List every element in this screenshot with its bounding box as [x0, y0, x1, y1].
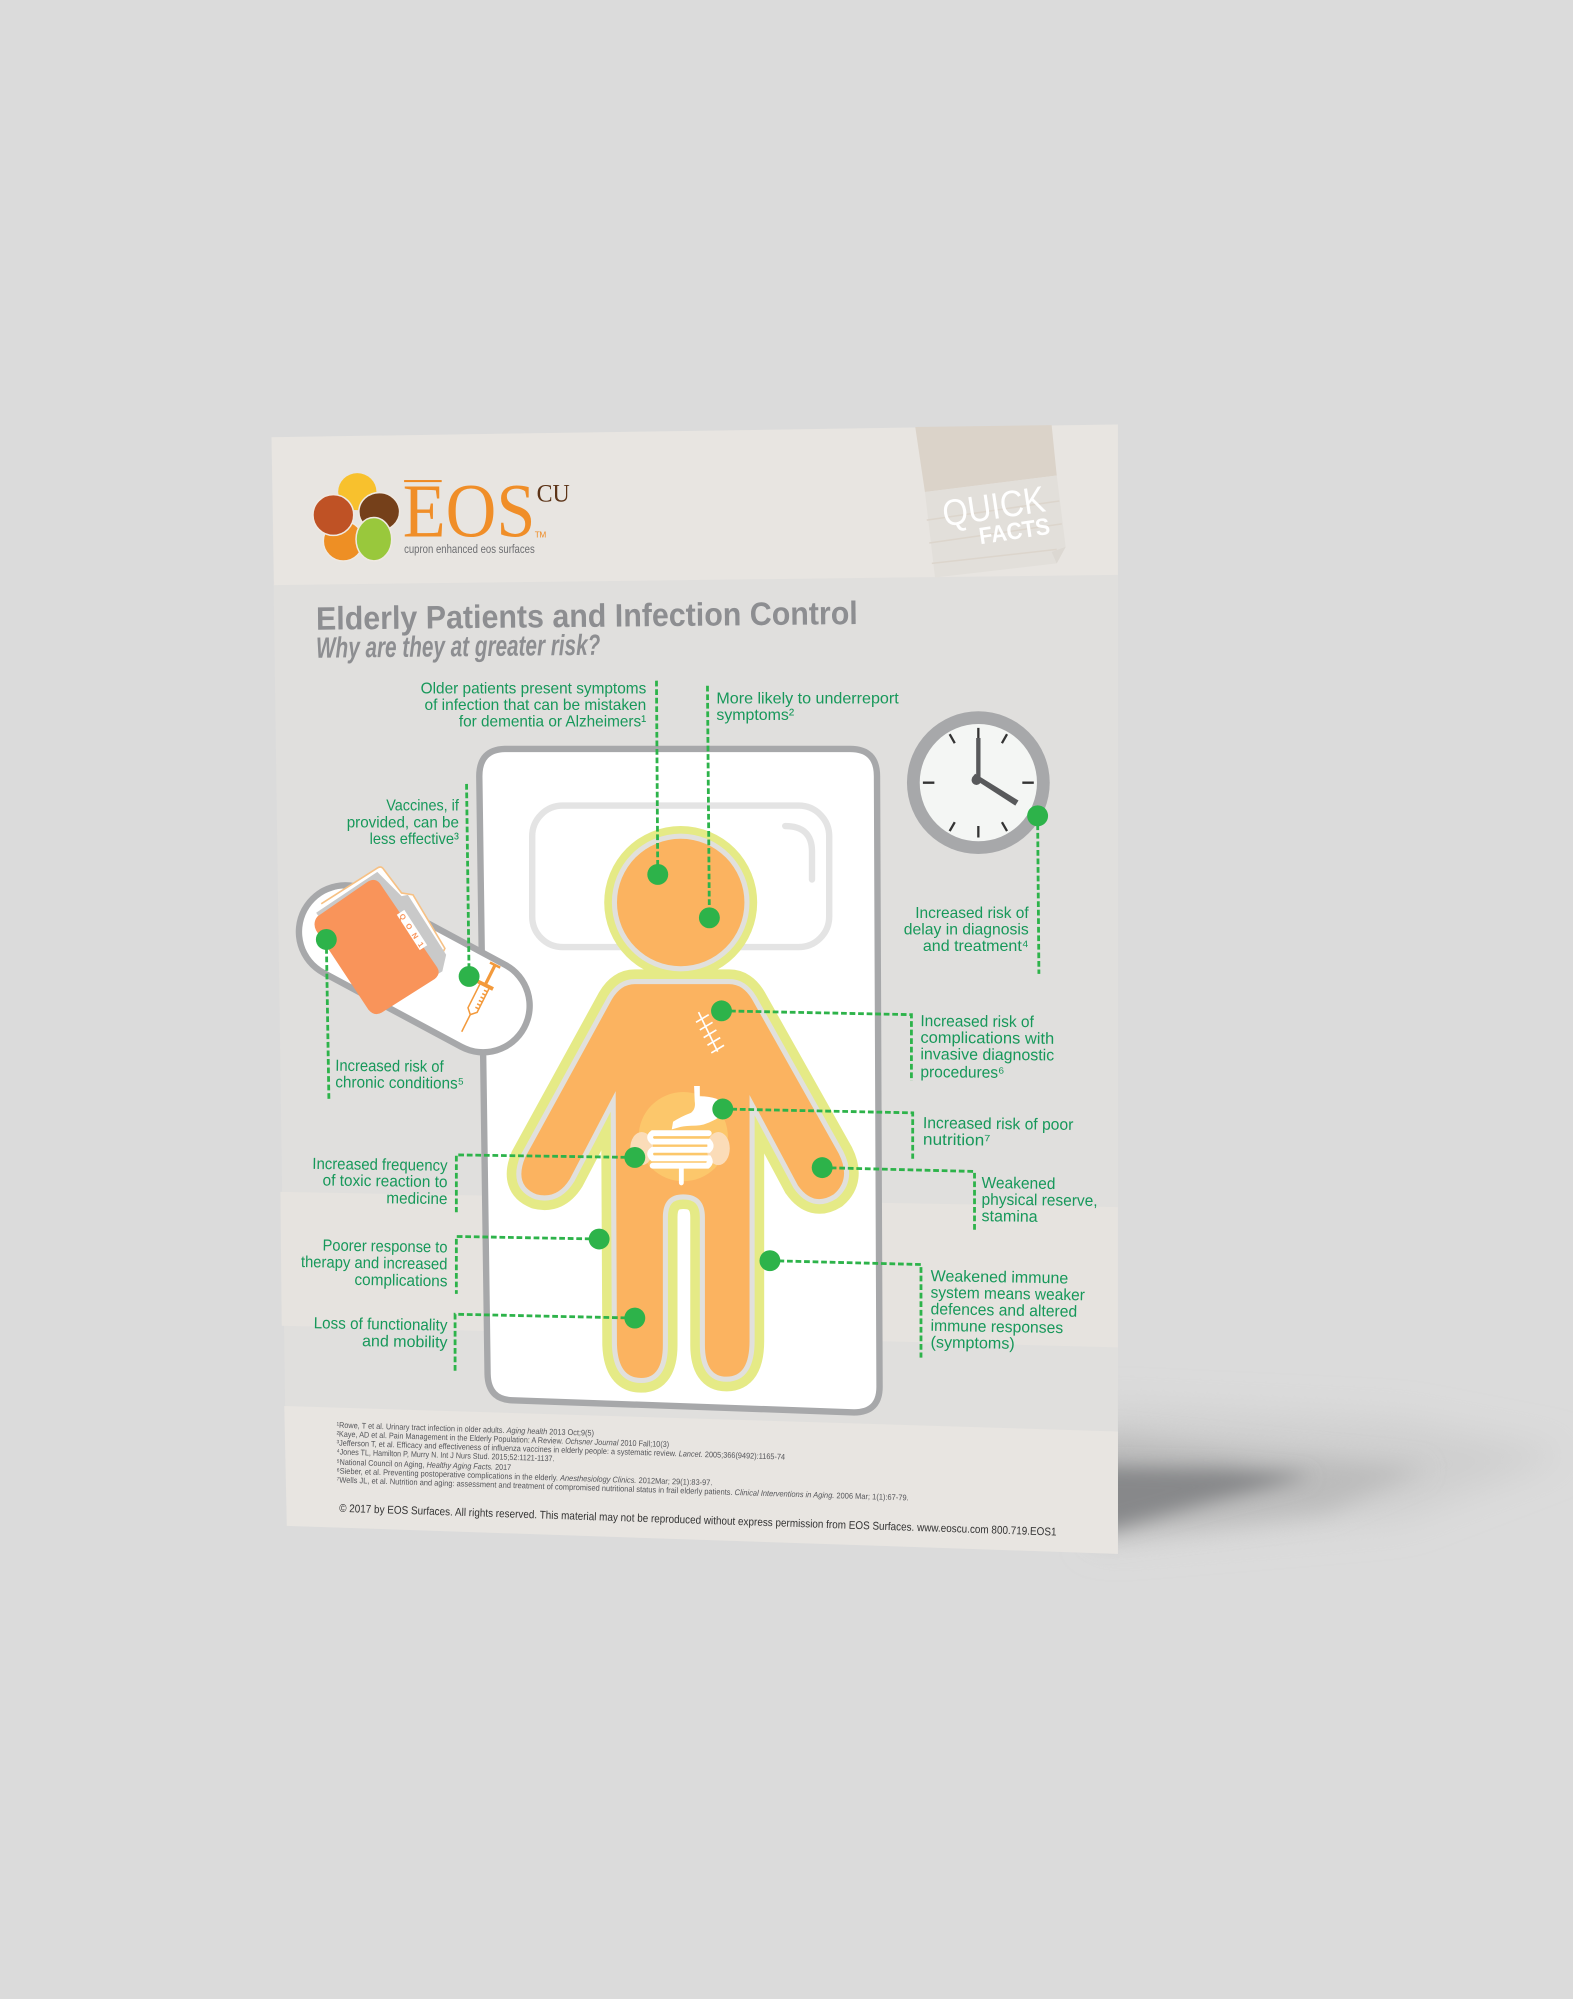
pillow [532, 806, 829, 947]
callout: underreport: symptoms² [716, 706, 795, 724]
callout: invasive procedures: complications with [920, 1029, 1054, 1048]
references: ¹Rowe, T et al. Urinary tract infection in older adults. Aging health 2013 Oct;9(5) [336, 1421, 594, 1438]
callout: delay [904, 904, 1029, 955]
callout: nutrition [923, 1114, 1074, 1150]
callout: older patients: Older patients present symptoms [421, 679, 646, 697]
callout: physical reserve: Weakened [981, 1174, 1056, 1193]
callout: underreport [716, 690, 899, 724]
callout: older patients: of infection that can be mistaken [424, 696, 646, 714]
callout: immune system: immune responses [930, 1317, 1063, 1337]
callout: vaccines: Vaccines, if [386, 797, 459, 815]
icon: quick facts tag [915, 425, 1066, 577]
references [336, 1421, 909, 1502]
callout: immune system: (symptoms) [930, 1333, 1015, 1353]
references: ²Kaye, AD et al. Pain Management in the Elderly Population: A Review. Ochsner Journal 2010 Fall;10(3) [336, 1430, 670, 1449]
callout: poorer response [301, 1236, 448, 1290]
icon: digestive organs [630, 1086, 730, 1183]
subtitle: Why are they at greater risk? [316, 629, 601, 665]
callout: delay: delay in diagnosis [904, 920, 1029, 938]
callout: nutrition: nutrition⁷ [923, 1131, 991, 1150]
callout: physical reserve [981, 1174, 1098, 1226]
callout: underreport: More likely to underreport [716, 690, 899, 708]
icon: folder [314, 867, 446, 1014]
logo: TM [535, 530, 546, 539]
callout: immune system [930, 1267, 1086, 1353]
logo: EOS [403, 469, 535, 554]
callout: nutrition: Increased risk of poor [923, 1114, 1074, 1134]
references: ⁷Wells JL, et al. Nutrition and aging: assessment and treatment of compromised nutritional status in frail elderly patients. Clinical Interventions in Aging. 2006 Mar; 1(1):67-79. [336, 1475, 909, 1502]
callout: poorer response: Poorer response to [322, 1236, 448, 1256]
callout: toxic reaction [312, 1155, 448, 1208]
copyright line: © 2017 by EOS Surfaces. All rights reserved. This material may not be reproduced without express permission from EOS Surfaces. www.eoscu.com 800.719.EOS1 [339, 1503, 1057, 1539]
callout: functionality: and mobility [362, 1332, 448, 1352]
callout: invasive procedures: Increased risk of [920, 1012, 1034, 1031]
references: ⁴Jones TL, Hamilton P, Murry N. Int J Nurs Stud. 2015;52:1121-1137. [336, 1447, 555, 1463]
sheet shadow [1096, 1407, 1568, 1540]
callout: invasive procedures: procedures⁶ [920, 1063, 1005, 1082]
callout: immune system: system means weaker [930, 1284, 1086, 1304]
callout: delay: and treatment⁴ [923, 937, 1029, 955]
icon: quick facts tag: FACTS [977, 513, 1052, 549]
icon: folder: QON1 [397, 912, 426, 949]
callout: physical reserve: physical reserve, [981, 1191, 1098, 1210]
callout: poorer response: complications [354, 1271, 448, 1290]
callout: vaccines: less effective³ [370, 830, 459, 848]
connector lines [326, 681, 1039, 1372]
bed [479, 749, 880, 1412]
logo [313, 469, 570, 561]
callout: chronic conditions: chronic conditions⁵ [335, 1073, 464, 1093]
callout: immune system: Weakened immune [930, 1267, 1068, 1287]
panel: sheet [272, 424, 1118, 1554]
callout: functionality [314, 1314, 448, 1352]
callout: older patients: for dementia or Alzheimers¹ [459, 713, 646, 731]
callout: functionality: Loss of functionality [314, 1314, 448, 1335]
callout: invasive procedures [920, 1012, 1054, 1082]
callout: vaccines [347, 797, 459, 848]
callout: chronic conditions [335, 1057, 464, 1093]
tray capsule [345, 932, 483, 1006]
references: ³Jefferson T, et al. Efficacy and effectiveness of influenza vaccines in elderly people: a systematic review. Lancet. 2005;366(9492):1165-74 [336, 1439, 786, 1462]
callout: toxic reaction: of toxic reaction to [322, 1171, 448, 1191]
callout: older patients [421, 679, 646, 731]
callout: delay: Increased risk of [915, 904, 1029, 922]
logo: CU [537, 481, 570, 508]
icon: clock [907, 711, 1050, 854]
icon: quick facts tag: QUICK [940, 479, 1048, 534]
callout: vaccines: provided, can be [347, 813, 459, 831]
marker dots [316, 805, 1048, 1329]
callout: physical reserve: stamina [981, 1207, 1038, 1226]
callout: poorer response: therapy and increased [301, 1253, 448, 1273]
logo: cupron enhanced eos surfaces [404, 542, 535, 556]
icon: syringe [454, 961, 503, 1036]
references: ⁵National Council on Aging, Healthy Aging Facts. 2017 [336, 1458, 512, 1472]
icon: stitches [696, 1012, 724, 1053]
callout: chronic conditions: Increased risk of [335, 1057, 444, 1076]
callout: toxic reaction: medicine [386, 1189, 448, 1208]
callout: invasive procedures: invasive diagnostic [920, 1045, 1054, 1064]
figure: patient body [521, 826, 844, 1378]
references: ⁶Sieber, et al. Preventing postoperative complications in the elderly. Anesthesiology Clinics. 2012Mar; 29(1):83-97. [336, 1467, 713, 1487]
callout: immune system: defences and altered [930, 1300, 1077, 1321]
title: Elderly Patients and Infection Control [316, 595, 858, 637]
callout: toxic reaction: Increased frequency [312, 1155, 448, 1175]
